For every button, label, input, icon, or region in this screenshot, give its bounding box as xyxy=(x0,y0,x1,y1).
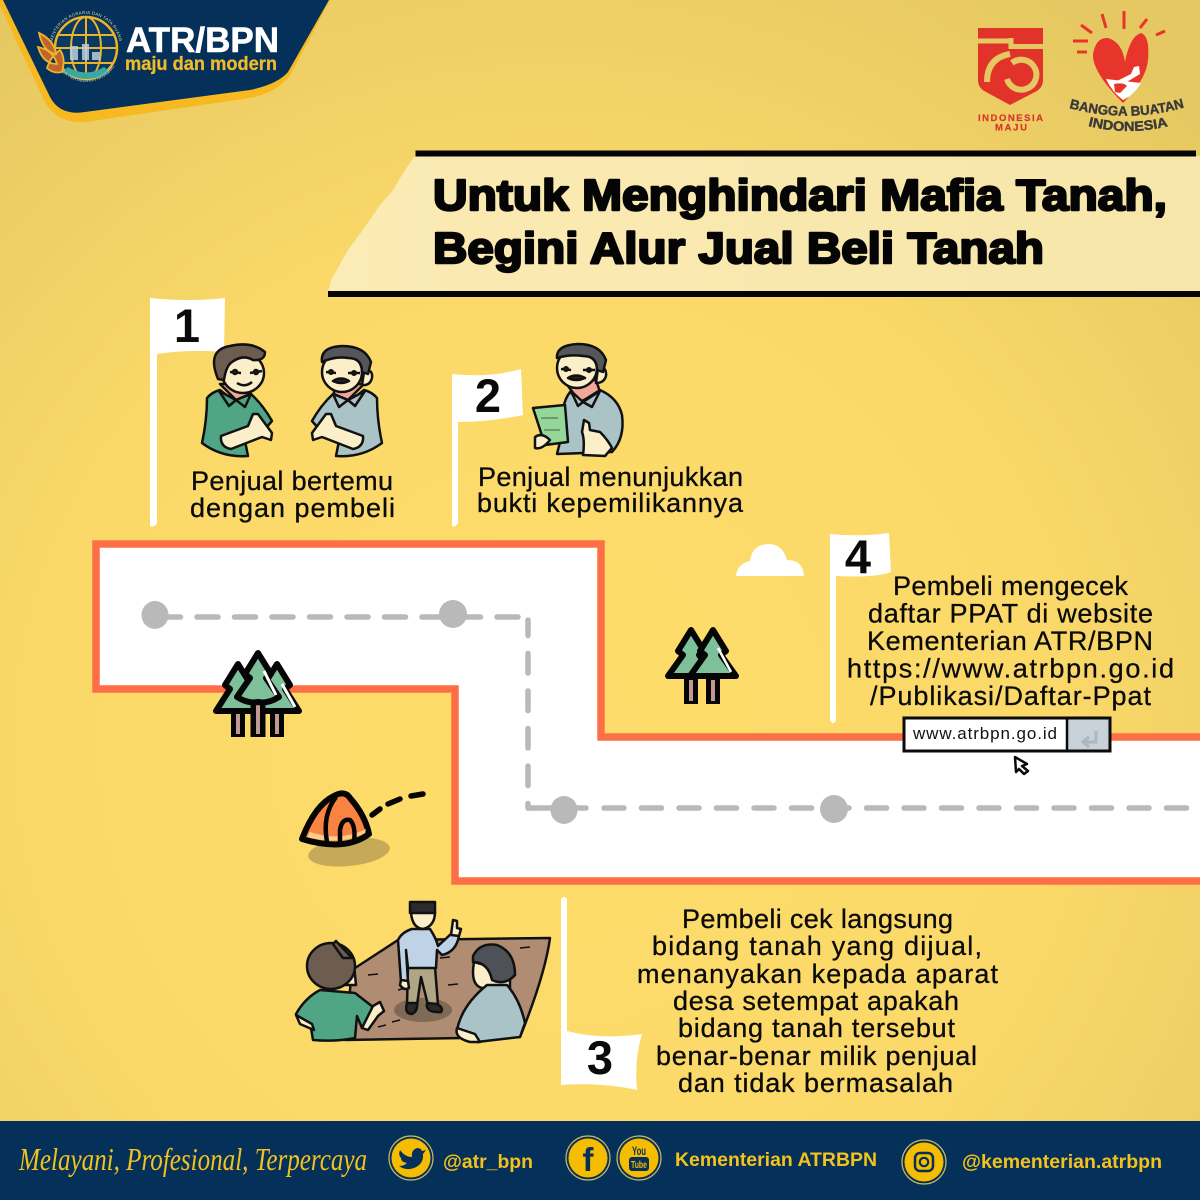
icon: facebook: f xyxy=(582,1141,594,1178)
flag 3 xyxy=(561,897,642,1090)
title text: Untuk Menghindari Mafia Tanah, xyxy=(433,171,1167,220)
step 3 text xyxy=(637,904,998,1098)
step 3 xyxy=(296,897,998,1098)
icon: ATR/BPN emblem xyxy=(36,11,122,82)
step 2 text: Penjual menunjukkan xyxy=(478,462,743,492)
step 4 text: /Publikasi/Daftar-Ppat xyxy=(870,681,1151,711)
step 3 text: menanyakan kepada aparat xyxy=(637,959,998,989)
flag 4: 4 xyxy=(845,530,871,583)
step 4 text: Pembeli mengecek xyxy=(893,571,1128,601)
step 2 text xyxy=(477,462,744,518)
facebook and youtube name: Kementerian ATRBPN xyxy=(675,1150,877,1171)
step 4 text: Kementerian ATR/BPN xyxy=(867,626,1153,656)
flag 1: 1 xyxy=(174,299,200,352)
step 4 text: https://www.atrbpn.go.id xyxy=(847,654,1174,684)
flag 1 xyxy=(150,298,225,527)
title text xyxy=(433,171,1167,273)
title banner xyxy=(328,150,1200,297)
step 2 xyxy=(452,344,744,527)
step 1 xyxy=(150,298,395,527)
title text: Begini Alur Jual Beli Tanah xyxy=(433,224,1044,273)
logo: 75 Indonesia Maju xyxy=(978,28,1043,134)
dashed route xyxy=(160,617,1200,808)
step 1 text: Penjual bertemu xyxy=(191,466,393,496)
logo: Bangga Buatan Indonesia xyxy=(1070,11,1184,132)
step 3 text: desa setempat apakah xyxy=(673,986,959,1016)
step 3 text: dan tidak bermasalah xyxy=(678,1068,953,1098)
step 3 text: Pembeli cek langsung xyxy=(682,904,953,934)
logo: Bangga Buatan Indonesia: INDONESIA xyxy=(1088,117,1168,132)
footer bar xyxy=(0,1121,1200,1200)
tagline: maju dan modern xyxy=(125,54,277,75)
step 3 text: bidang tanah tersebut xyxy=(678,1013,955,1043)
header badge: ATR/BPN logo xyxy=(0,0,330,122)
instagram handle: @kementerian.atrbpn xyxy=(962,1152,1162,1173)
step 4 text xyxy=(847,571,1174,711)
flag 2 xyxy=(452,369,523,527)
url input box: www.atrbpn.go.id xyxy=(912,724,1057,743)
step 1 text: dengan pembeli xyxy=(190,493,395,523)
logo: 75 Indonesia Maju: INDONESIA xyxy=(978,113,1043,124)
icon: youtube xyxy=(617,1136,661,1180)
road xyxy=(96,544,1200,881)
illustration: green-shirt man greeting xyxy=(202,344,272,456)
flag 4 xyxy=(830,530,891,723)
logo: 75 Indonesia Maju: MAJU xyxy=(995,122,1027,134)
icon: instagram xyxy=(902,1140,946,1184)
trees by flag 4 xyxy=(668,630,736,704)
logo: Bangga Buatan Indonesia: BANGGA BUATAN xyxy=(1070,98,1184,116)
illustration: grey-shirt man greeting xyxy=(312,346,382,456)
illustration: land inspection scene xyxy=(296,902,550,1042)
icon: mouse cursor xyxy=(1015,757,1028,774)
route stops xyxy=(142,600,848,824)
icon: tent with dotted trail xyxy=(302,793,423,870)
twitter handle: @atr_bpn xyxy=(443,1152,533,1173)
icon: cloud xyxy=(736,544,804,576)
motto: Melayani, Profesional, Terpercaya xyxy=(18,1141,367,1177)
step 3 text: bidang tanah yang dijual, xyxy=(652,931,982,961)
icon: twitter xyxy=(389,1136,433,1180)
step 3 text: benar-benar milik penjual xyxy=(656,1041,977,1071)
flag 2: 2 xyxy=(475,369,501,422)
flag 3: 3 xyxy=(587,1031,613,1084)
icon: youtube: You xyxy=(632,1144,646,1158)
step 1 text xyxy=(190,466,395,523)
icon: ATR/BPN emblem: KEMENTERIAN AGRARIA DAN TATA RUANG xyxy=(50,11,122,42)
icon: ATR/BPN emblem: BADAN PERTANAHAN NASIONAL xyxy=(63,66,115,82)
step 4 text: daftar PPAT di website xyxy=(868,598,1153,628)
url input box xyxy=(904,718,1110,751)
icon: facebook xyxy=(566,1136,610,1180)
icon: youtube: Tube xyxy=(631,1160,647,1171)
trees on road edge xyxy=(216,653,299,737)
step 2 text: bukti kepemilikannya xyxy=(477,488,744,518)
brand name: ATR/BPN xyxy=(126,21,279,60)
step 4 xyxy=(830,530,1174,774)
illustration: man showing certificate xyxy=(533,344,623,456)
